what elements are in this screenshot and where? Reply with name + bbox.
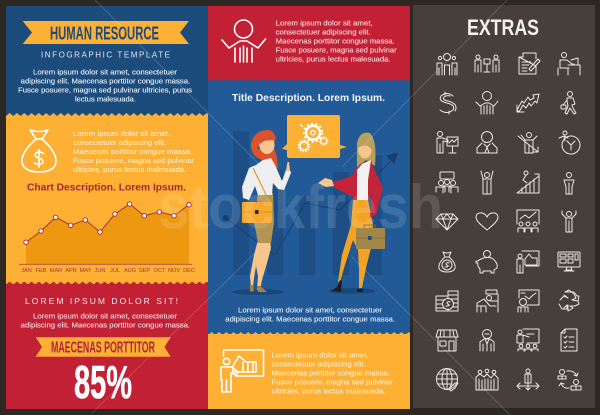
chart intro text: consectetuer adipiscing elit. [73,138,166,147]
icon: person arms up [481,171,493,194]
chart heading: Chart Description. Lorem Ipsum. [27,182,186,194]
panel: illustration [208,78,410,334]
icon: training group [517,329,539,351]
intro text [18,68,192,104]
icon: tired worker at desk [477,290,498,312]
ribbon banner: HUMAN RESOURCE [50,22,159,44]
chart intro text: Maecenas porttitor congue massa. [73,147,192,156]
text block: ultricies, purus lectus malesuada. [272,386,386,395]
icon: tired employee [480,330,494,351]
month labels: JAN [21,268,32,274]
ribbon banner: MAECENAS PORTTITOR [51,340,155,357]
caption [225,305,395,324]
section heading: LOREM IPSUM DOLOR SIT! [25,296,178,306]
icon: coin stacks [436,291,458,311]
icon: teacher at board [518,290,539,312]
section text [21,311,190,330]
icon: document with pen [519,53,540,74]
chart intro text: Fusce posuere, magna sed pulvinar [73,156,195,165]
chart intro text: ultricies, purus lectus malesuada. [73,165,186,174]
big percentage: 85% [74,356,132,408]
icon: presenter [437,132,458,153]
text block: Lorem ipsum dolor sit amet, [272,350,369,359]
icon: audience chart [517,210,539,232]
icon: walking person with bag [561,92,576,114]
panel: chart section [6,113,208,284]
background bars [233,131,382,275]
icon: presenter at board [221,350,264,392]
text block [276,18,397,64]
panel: yellow text block [208,332,410,409]
icon: manager bust [477,132,497,153]
icon: presenter with chart [517,251,539,273]
icon: team idea [437,54,457,75]
text block: ultricies, purus lectus malesuada. [276,54,391,64]
icon: piggy bank [476,250,497,273]
icon: money bag [22,130,56,172]
title: Title Description. Lorem Ipsum. [232,93,385,104]
extras heading: EXTRAS [467,15,539,40]
icon: team meeting [436,172,458,193]
icon: declining arrow [517,94,539,112]
panel: statistic [6,282,208,409]
panel: extras [413,5,595,408]
intro text: Lorem ipsum dolor sit amet, consectetuer [33,68,178,76]
icon: person with raised hands [222,20,266,62]
intro text: Fusce posuere, magna sed pulvinar ultricies, purus [18,86,192,94]
month labels: JUL [110,268,120,274]
icon: businessman with coins [562,211,576,232]
icon: people exchange [558,370,581,390]
icon: person arms open [476,92,498,114]
icon: team growth [476,369,498,390]
icon: runner and clock [559,131,580,154]
text block: Maecenas porttitor congue massa. [276,36,395,46]
icon: climbing growth chart [517,171,539,193]
caption: Lorem ipsum dolor sit amet, consectetuer [238,305,383,314]
panel: left column [6,6,208,409]
intro text: adipiscing elit. Maecenas porttitor congue massa. [21,76,190,86]
section text: Lorem ipsum dolor sit amet, consectetuer [33,311,178,320]
illustration: right woman [318,133,385,294]
text block: consectetuer adipiscing elit. [272,359,366,368]
month labels: DEC [183,268,195,274]
text block [272,350,393,395]
icon: recycle [559,290,579,311]
icon: store [436,330,458,351]
month labels: AUG [124,268,136,274]
month labels: APR [65,268,77,274]
icon: diamond [436,214,458,230]
section text: adipiscing elit. Maecenas porttitor congue massa. [21,321,190,330]
text block: Lorem ipsum dolor sit amet, [276,18,373,28]
watermark lines [92,0,510,415]
speech bubble with gears [282,115,347,158]
text block: consectetuer adipiscing elit. [276,28,371,36]
month labels: MAY [80,268,92,274]
month labels: FEB [36,268,47,274]
icon: person with direction arrows [517,369,539,390]
text block: Maecenas porttitor congue massa. [272,368,390,377]
icon: business meeting [475,55,499,72]
text block: Fusce posuere, magna sed pulvinar [276,46,397,54]
caption: adipiscing elit. Maecenas porttitor congue massa. [225,315,395,324]
panel: red text block [208,6,410,81]
icon: globe [436,368,458,391]
month labels: NOV [168,268,180,274]
illustration: left woman [232,130,291,295]
month labels: JUN [95,268,105,274]
icon: person with arrows [518,132,538,153]
chart intro text: Lorem ipsum dolor sit amet, [73,129,170,138]
panel: header [6,6,208,116]
panel: middle column [208,6,410,409]
subtitle: INFOGRAPHIC TEMPLATE [41,50,170,60]
icon: heart [476,213,498,230]
background trend arrow [223,153,397,255]
month labels: SEP [139,268,150,274]
month labels: MAR [50,268,62,274]
area line chart [19,202,195,274]
icon: dollar sign [440,92,456,114]
month labels: OCT [154,268,166,274]
watermark text: stockfresh [158,173,443,242]
ribbon banner [23,21,189,44]
ribbon banner [36,337,171,357]
icon: standing person [564,172,574,194]
text block: Fusce posuere, magna sed pulvinar [272,377,393,386]
chart intro text [73,129,195,174]
icon: person at desk [558,52,580,75]
icon: checklist [561,329,577,351]
month labels [21,268,195,274]
intro text: lectus malesuada. [75,94,136,104]
icon: computer dashboard [558,252,580,271]
icon: money bag small [439,252,455,272]
